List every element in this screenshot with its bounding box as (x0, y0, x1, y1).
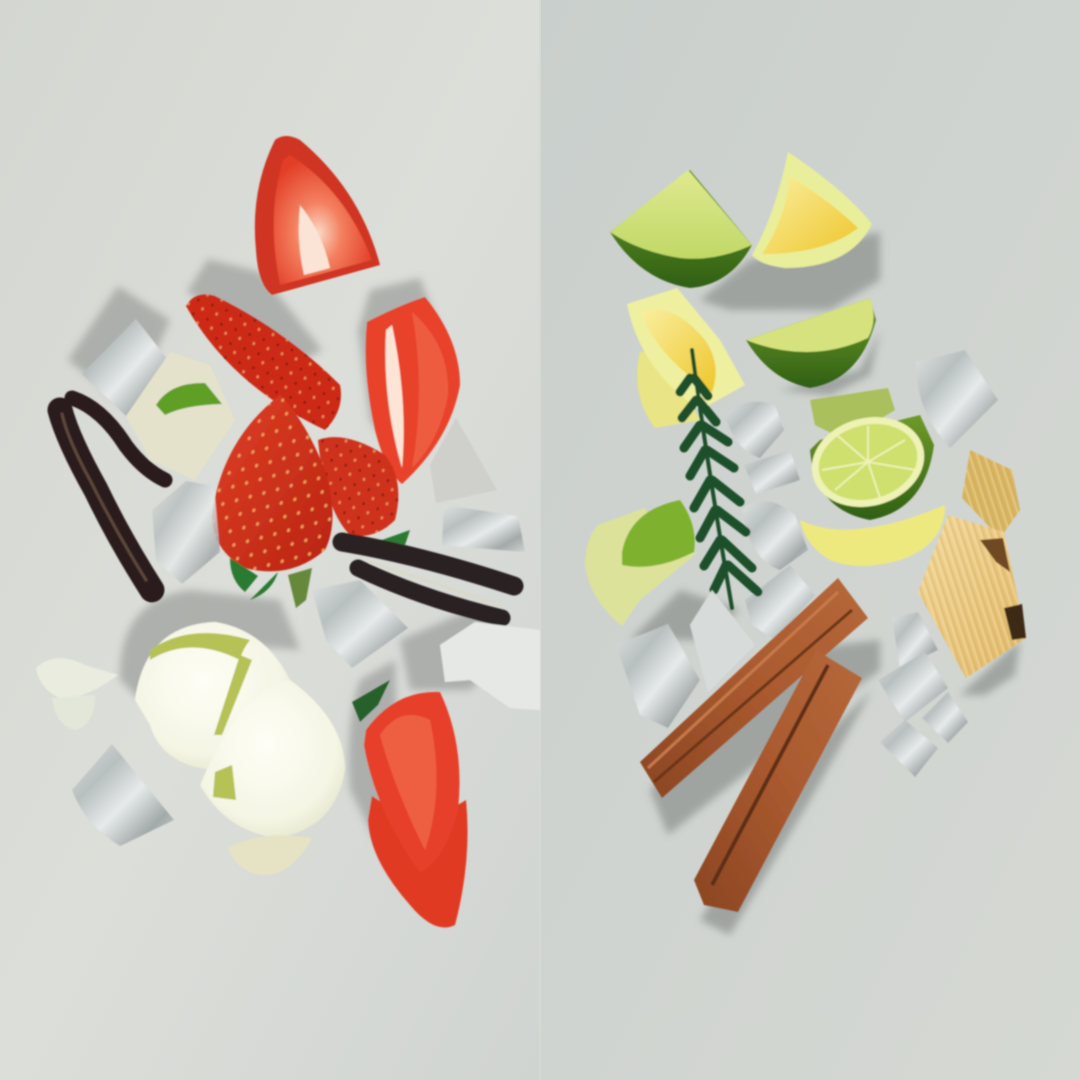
icon: ice cube lower centre (690, 590, 755, 692)
icon: partly hidden strawberry (318, 437, 398, 536)
icon: wood chip large (918, 515, 1026, 678)
icon: cinnamon stick lower (694, 650, 862, 912)
icon: ice cube lower left (72, 744, 174, 846)
icon: strawberry slice right (366, 297, 460, 484)
icon: ice cube lower left (616, 624, 700, 728)
icon: cinnamon stick upper (640, 578, 868, 798)
icon: rosemary sprig (680, 350, 758, 608)
cast shadows (630, 232, 1020, 935)
icon: vanilla pods left (60, 398, 165, 590)
panel: left background (0, 0, 539, 1080)
icon: small ice cubes centre (725, 402, 815, 640)
icon: lemon slice (800, 505, 945, 566)
icon: ice cube centre (312, 580, 408, 668)
icon: flower petals (36, 658, 118, 730)
panel: right background (541, 0, 1080, 1080)
icon: small ice cubes right (878, 612, 968, 777)
icon: ice cube centre left (152, 481, 220, 584)
icon: whole strawberry (212, 395, 332, 571)
icon: lime half (802, 388, 934, 520)
icon: vanilla ice cream scoops (135, 622, 345, 838)
icon: ice cube upper left (82, 319, 235, 480)
icon: vanilla pods centre (342, 542, 514, 618)
icon: ice cube right (430, 418, 525, 552)
icon: strawberry slice diagonal (186, 294, 341, 430)
icon: strawberry halves lower (352, 680, 468, 928)
panel: strawberry and vanilla ingredients (36, 136, 540, 928)
panel: citrus and spice ingredients (585, 152, 1026, 935)
cast shadows (68, 259, 520, 840)
icon: lime wedge middle (746, 298, 876, 388)
icon: leaves (230, 530, 410, 608)
icon: ice cube top right (916, 350, 998, 448)
icon: lime wedge top left (610, 170, 752, 288)
icon: lemon wedges left (627, 288, 745, 428)
icon: vanilla flower petal bottom (228, 836, 312, 875)
icon: ice cube far right (440, 622, 540, 710)
icon: wood chip small (962, 450, 1020, 538)
icon: lemon wedge top right (752, 152, 872, 268)
icon: lime wedges on lime slice left (585, 500, 698, 626)
icon: top strawberry slice (255, 136, 380, 295)
